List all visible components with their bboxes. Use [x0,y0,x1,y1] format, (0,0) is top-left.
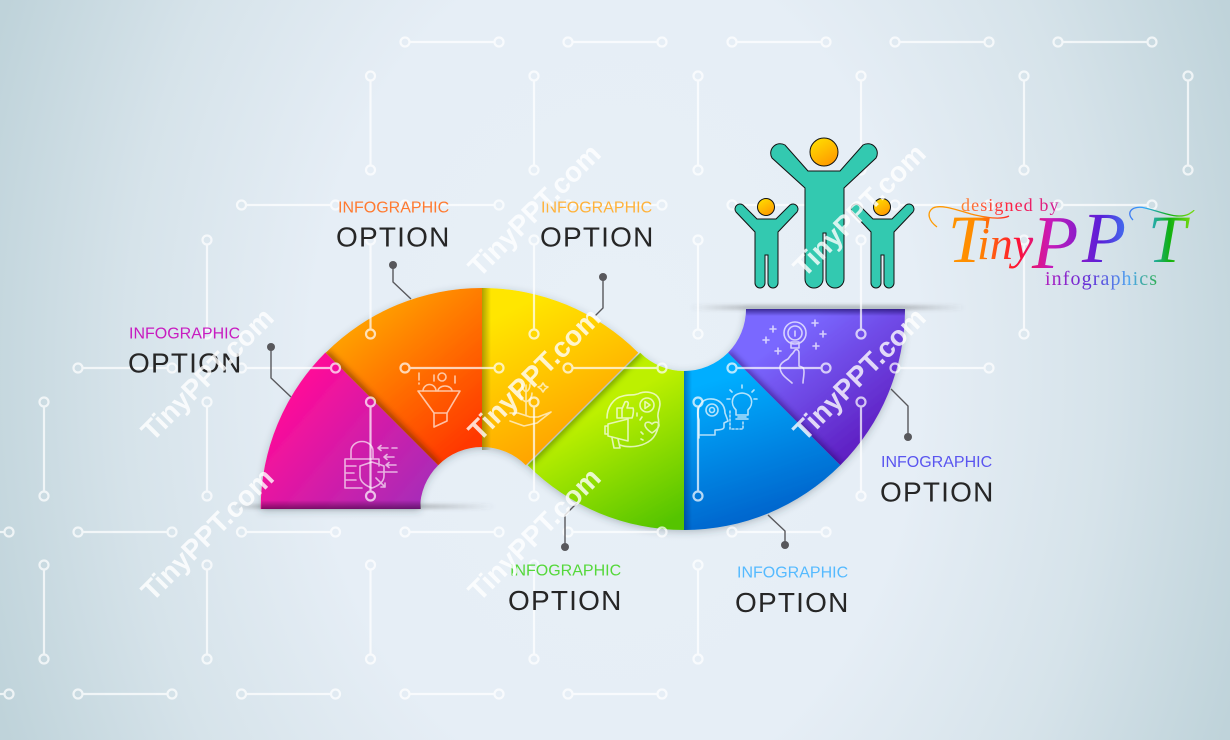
label: purple option: INFOGRAPHIC [881,454,992,471]
segment: purple [728,309,905,465]
icon: head with gear and light bulb [698,385,757,438]
connector: blue [768,515,789,549]
figure: small right [851,198,914,288]
icon: funnel with coins [418,373,460,427]
figure: small left [735,198,798,288]
icon: hand holding wheat [510,383,551,426]
watermark: TinyPPT.com repeated: TinyPPT.com [135,302,280,447]
icon: idea light bulb and finger [763,320,826,383]
label: orange option: OPTION [336,222,451,252]
segment: blue [684,353,840,530]
segment: green [528,353,684,530]
watermark: TinyPPT.com repeated: TinyPPT.com [787,138,932,283]
connector: magenta [267,343,291,397]
label: magenta option [128,326,243,378]
logo: designed by TinyPPT infographics: P [1081,198,1126,278]
watermark: TinyPPT.com repeated: TinyPPT.com [135,462,280,607]
connector: yellow [595,273,607,316]
label: orange option [336,200,451,252]
watermark: TinyPPT.com repeated: TinyPPT.com [462,138,607,283]
label: green option: OPTION [508,585,623,616]
label: orange option: INFOGRAPHIC [338,200,449,216]
watermark: TinyPPT.com repeated: TinyPPT.com [462,462,607,607]
label: blue option: INFOGRAPHIC [737,564,848,582]
label: purple option [880,454,995,508]
connector: green [561,503,577,551]
watermark: TinyPPT.com repeated: TinyPPT.com [787,302,932,447]
S-shaped six-segment chart [261,288,905,530]
figure: large centre [771,138,877,288]
label: purple option: OPTION [880,476,995,508]
segment: magenta [261,353,438,509]
segment: orange [326,288,482,465]
logo: designed by TinyPPT infographics: iny [977,218,1034,269]
icon: megaphone with social symbols [605,392,660,448]
segment: yellow [482,288,638,465]
label: yellow option: OPTION [540,222,655,252]
label: green option: INFOGRAPHIC [510,562,621,580]
icon: padlock with shield [345,442,397,488]
connector: orange [389,261,411,299]
logo: designed by TinyPPT infographics: P [1031,201,1078,285]
label: yellow option [540,200,655,252]
logo: designed by TinyPPT infographics: designed by [961,195,1060,215]
label: yellow option: INFOGRAPHIC [541,200,652,216]
logo: designed by TinyPPT infographics: infographics [1045,268,1158,290]
watermark: TinyPPT.com repeated [135,138,932,607]
logo: designed by TinyPPT infographics: T [948,201,990,277]
label: blue option [735,564,850,618]
label: magenta option: OPTION [128,348,243,378]
logo: designed by TinyPPT infographics [929,195,1194,290]
shelf shadows [230,305,965,509]
label: magenta option: INFOGRAPHIC [129,326,240,342]
watermark: TinyPPT.com repeated: TinyPPT.com [462,302,607,447]
label: green option [508,562,623,616]
connector: purple [891,389,912,441]
label: blue option: OPTION [735,587,850,618]
icon: three people with raised arms [735,138,914,288]
logo: designed by TinyPPT infographics: T [1148,201,1190,277]
